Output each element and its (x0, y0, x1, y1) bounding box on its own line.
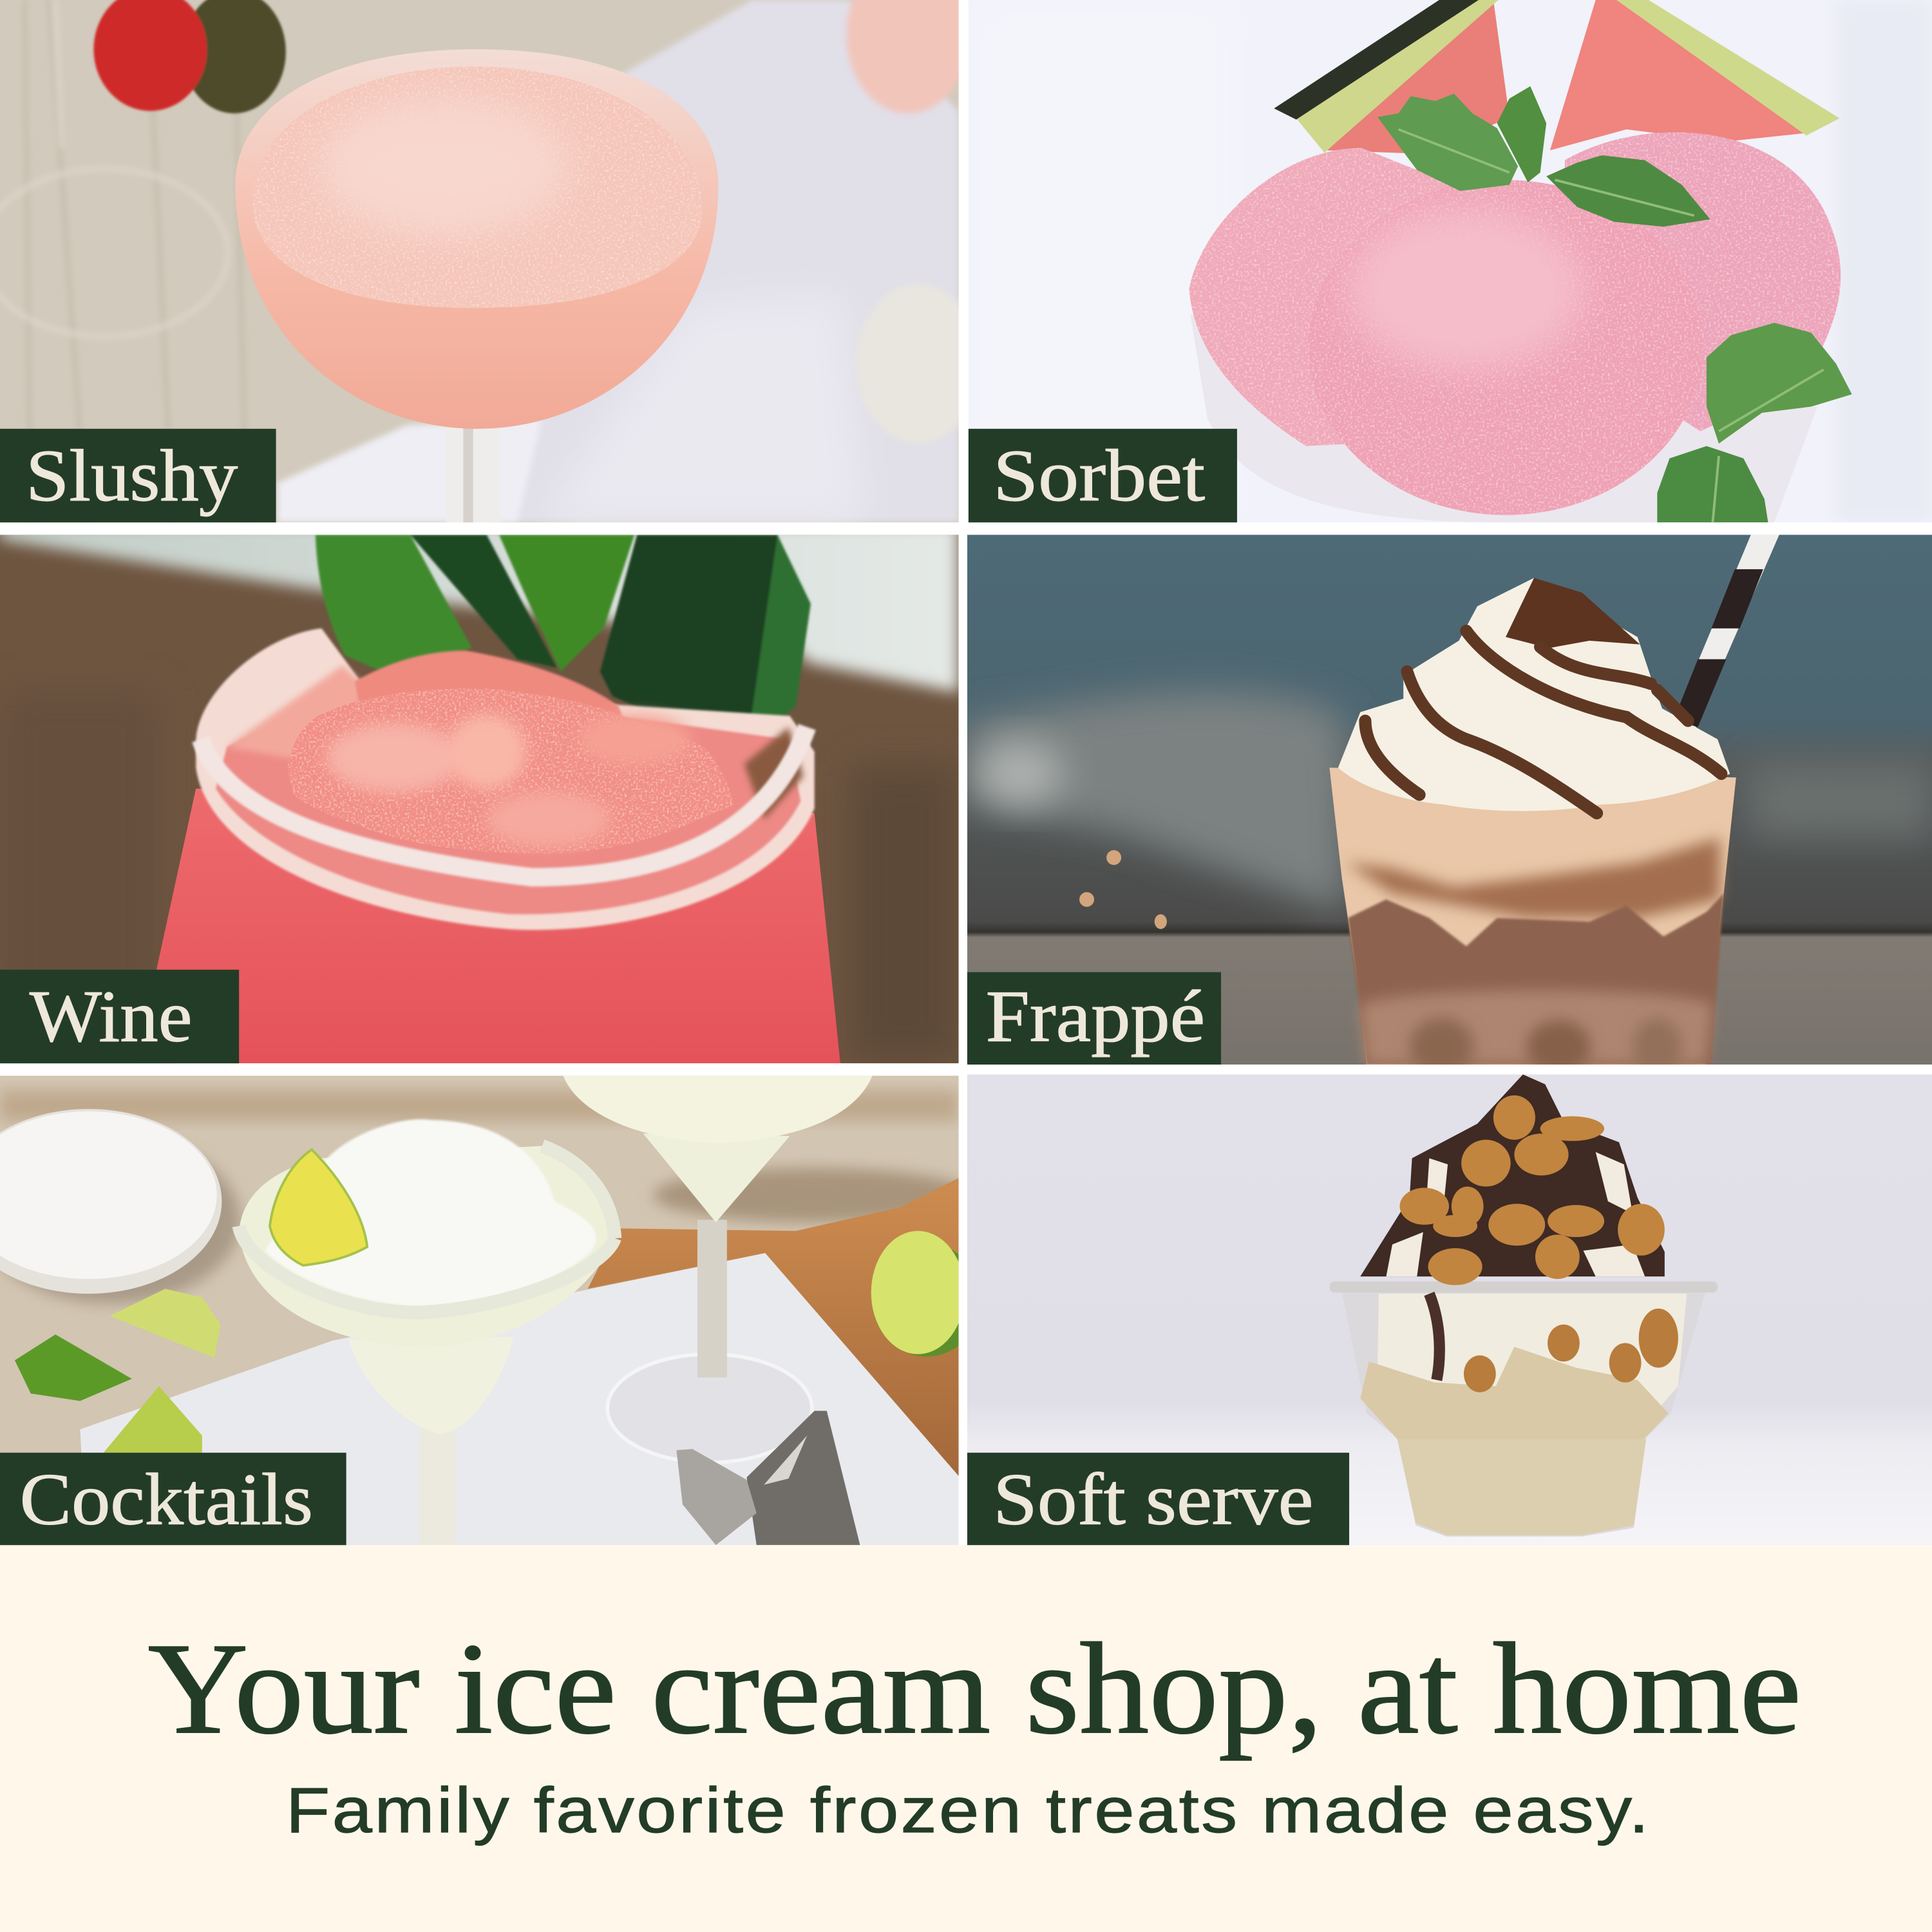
icon: watermelon slices (1274, 0, 1840, 154)
icon: mint leaves (1378, 86, 1852, 522)
icon: napkin (80, 1253, 960, 1545)
icon: sorbet scoops (1189, 132, 1841, 515)
panel: wine (0, 524, 959, 1063)
label: Wine (0, 970, 239, 1063)
icon: basil leaves (314, 535, 813, 717)
icon: background glass (21, 5, 169, 337)
icon: frappe glass (1329, 768, 1736, 1077)
label: Soft serve (967, 1453, 1349, 1545)
icon: rear margarita glass (563, 1075, 873, 1463)
icon: strawberry (93, 0, 286, 113)
panel: cocktails (0, 1075, 981, 1545)
icon: slush mound (287, 650, 734, 853)
icon: striped straw (1673, 535, 1779, 733)
label: Sorbet (969, 429, 1237, 522)
icon: whipped cream (1338, 578, 1730, 813)
subtitle: Family favorite frozen treats made easy. (286, 1775, 1651, 1846)
panel: sorbet (969, 0, 1932, 522)
icon: salted rim and glass lip (196, 629, 815, 930)
panel: slushy (0, 0, 980, 522)
icon: salt band (201, 727, 807, 877)
icon: chocolate peanut topping (1360, 1074, 1665, 1285)
icon: front margarita glass (239, 1119, 615, 1545)
title: Your ice cream shop, at home (148, 1616, 1801, 1761)
label: Cocktails: Cocktails (20, 1459, 313, 1540)
bottom caption panel (0, 1545, 1932, 1932)
panel: frappe (966, 535, 1932, 1077)
icon: white plate (0, 1109, 240, 1303)
panel: soft serve (967, 1074, 1932, 1545)
icon: red glass (156, 788, 840, 1063)
label: Wine: Wine (30, 976, 192, 1057)
icon: steel jigger (676, 1411, 860, 1545)
icon: sundae cup (1329, 1282, 1718, 1537)
icon: glass bowl (1190, 314, 1817, 522)
label: Slushy: Slushy (26, 435, 238, 516)
label: Sorbet: Sorbet (993, 435, 1205, 516)
label: Slushy (0, 429, 276, 522)
label: Soft serve: Soft serve (993, 1459, 1314, 1540)
icon: slushy coupe glass (235, 50, 718, 429)
label: Frappé: Frappé (986, 976, 1205, 1057)
icon: lime wedges (15, 1231, 981, 1453)
icon: glass stem (446, 419, 500, 522)
icon: wooden board (588, 1178, 959, 1479)
